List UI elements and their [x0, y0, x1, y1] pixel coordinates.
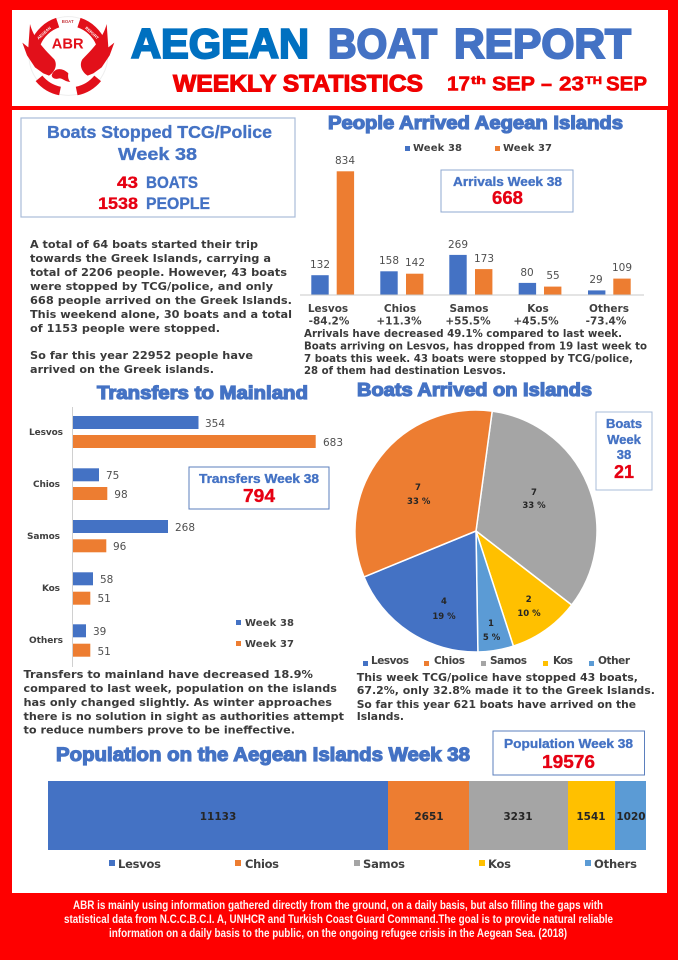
bar chart: transfers: 39 — [93, 626, 106, 638]
callout: boats week 38 — [596, 412, 652, 490]
text block: boats commentary: Islands. — [357, 710, 404, 723]
bar chart: arrivals: Samos — [449, 303, 489, 315]
heading: population: Population on the Aegean Islands Week 38 — [56, 745, 470, 766]
bar chart: arrivals: -73.4% — [586, 316, 627, 328]
pie chart: boats arrived: 1 — [488, 619, 494, 629]
legend: population — [109, 857, 637, 871]
bar chart: arrivals: +55.5% — [445, 316, 491, 328]
date range: 23 — [559, 74, 584, 96]
callout: arrivals week 38 — [441, 170, 573, 212]
legend: transfers chart — [236, 618, 294, 650]
text block: arrivals commentary: 7 boats this week. 43 boats were stopped by TCG/police, — [304, 352, 633, 365]
heading: transfers: Transfers to Mainland — [97, 383, 308, 403]
stacked bar: population: 2651 — [414, 811, 444, 823]
text block: arrivals commentary: Boats arriving on Lesvos, has dropped from 19 last week to — [304, 340, 647, 352]
bar chart: arrivals: 173 — [474, 253, 494, 265]
text block: arrivals commentary — [304, 327, 647, 377]
bar chart: arrivals: 132 — [310, 259, 330, 271]
bar chart: transfers: 354 — [205, 418, 225, 430]
legend: pie chart — [363, 655, 631, 667]
bar chart: transfers: Others — [29, 636, 63, 646]
text block: transfers commentary — [24, 668, 344, 736]
bar chart: arrivals: 142 — [405, 257, 425, 269]
bar chart: transfers: 51 — [98, 646, 111, 658]
footer text: ABR is mainly using information gathered directly from the ground, on a daily basis, but also filling the gaps with — [73, 900, 603, 912]
text block: transfers commentary: has only changed slightly. As winter approaches — [24, 696, 332, 709]
date range: TH — [585, 75, 602, 87]
bar chart: transfers: 96 — [113, 541, 127, 553]
legend: pie chart: Chios — [434, 655, 465, 667]
text block: weekly summary: total of 2206 people. However, 43 boats — [30, 266, 287, 279]
legend: transfers chart: Week 38 — [245, 618, 294, 629]
header panel — [12, 10, 668, 106]
heading: boats arrived: Boats Arrived on Islands — [357, 380, 592, 400]
bar chart: transfers: Lesvos — [29, 428, 63, 438]
text block: weekly summary: This weekend alone, 30 boats and a total — [30, 308, 292, 321]
pie chart: boats arrived — [355, 410, 597, 652]
bar chart: transfers: Chios — [33, 480, 60, 490]
panel: boats stopped — [21, 118, 295, 217]
bar chart: arrivals: Lesvos — [308, 303, 348, 315]
callout: boats week 38: Week — [607, 432, 642, 447]
legend: pie chart: Lesvos — [371, 655, 409, 667]
legend: population: Kos — [488, 857, 511, 871]
legend: arrivals chart: Week 38 — [413, 143, 462, 154]
callout: population week 38 — [493, 731, 644, 775]
text block: transfers commentary: there is no solution in sight as authorities attempt — [24, 710, 344, 723]
text block: transfers commentary: to reduce numbers prove to be ineffective. — [24, 724, 295, 736]
stacked bar: population: 1541 — [576, 811, 606, 823]
legend: transfers chart: Week 37 — [245, 639, 294, 650]
callout: boats week 38: 38 — [617, 447, 631, 462]
panel: boats stopped: PEOPLE — [146, 194, 210, 213]
pie chart: boats arrived: 5 % — [483, 633, 501, 643]
callout: boats week 38: 21 — [614, 462, 634, 482]
callout: arrivals week 38: Arrivals Week 38 — [453, 174, 562, 189]
text block: weekly summary: A total of 64 boats started their trip — [30, 238, 258, 251]
text block: weekly summary: were stopped by TCG/police, and only — [30, 280, 273, 293]
bar chart: arrivals: +11.3% — [376, 316, 422, 328]
bar chart: arrivals: 80 — [520, 267, 534, 279]
text block: arrivals commentary: Arrivals have decreased 49.1% compared to last week. — [304, 327, 622, 340]
panel: boats stopped: BOATS — [146, 173, 198, 192]
stacked bar: population: 3231 — [503, 811, 533, 823]
stacked bar: population: 11133 — [200, 811, 236, 823]
bar chart: arrivals: 55 — [546, 270, 560, 282]
bar chart: transfers: Samos — [27, 532, 60, 542]
icon: ABR logo — [22, 17, 114, 95]
text block: weekly summary: arrived on the Greek islands. — [30, 363, 214, 376]
pie chart: boats arrived: 33 % — [407, 497, 431, 507]
icon: ABR logo: ABR — [52, 37, 84, 53]
bar chart: transfers: 683 — [323, 437, 343, 449]
main white panel — [12, 110, 667, 893]
bar chart: arrivals: +45.5% — [513, 316, 559, 328]
footer text: information on a daily basis to the public, on the ongoing refugee crisis in the Aegean Sea. (2018) — [109, 928, 567, 940]
bar chart: arrivals — [300, 155, 644, 328]
text block: weekly summary: So far this year 22952 people have — [30, 349, 253, 362]
panel: boats stopped: 1538 — [98, 194, 138, 213]
bar chart: arrivals: Kos — [527, 303, 549, 315]
bar chart: arrivals: -84.2% — [309, 316, 350, 328]
date range — [447, 74, 647, 96]
title: REPORT — [454, 20, 631, 67]
legend: pie chart: Samos — [490, 655, 527, 667]
callout: transfers week 38: 794 — [243, 486, 275, 506]
icon: ABR logo: REPORT — [84, 25, 100, 41]
legend: population: Chios — [245, 857, 279, 871]
text block: transfers commentary: Transfers to mainland have decreased 18.9% — [24, 668, 313, 681]
panel: boats stopped: Boats Stopped TCG/Police — [47, 122, 272, 142]
date range: SEP — [606, 74, 647, 96]
text block: boats commentary: This week TCG/police have stopped 43 boats, — [357, 671, 638, 684]
icon: ABR logo: AEGEAN — [36, 25, 52, 40]
bar chart: transfers: 75 — [106, 470, 119, 482]
callout: arrivals week 38: 668 — [492, 188, 523, 208]
legend: arrivals chart — [405, 143, 552, 154]
legend: arrivals chart: Week 37 — [503, 143, 552, 154]
title: BOAT — [328, 20, 437, 67]
title — [131, 20, 631, 67]
text block: arrivals commentary: 28 of them had destination Lesvos. — [304, 364, 506, 377]
bar chart: arrivals: 29 — [589, 274, 603, 286]
panel: boats stopped: Week 38 — [118, 144, 197, 164]
text block: boats commentary: 67.2%, only 32.8% made it to the Greek Islands. — [357, 684, 655, 697]
text block: transfers commentary: compared to last week, population on the islands — [24, 682, 337, 695]
pie chart: boats arrived: 4 — [441, 597, 447, 607]
pie chart: boats arrived: 33 % — [522, 501, 546, 511]
stacked bar: population — [48, 781, 646, 850]
callout: population week 38: Population Week 38 — [504, 736, 633, 751]
text block: boats commentary — [357, 671, 655, 723]
callout: transfers week 38 — [189, 467, 329, 509]
bar chart: transfers — [27, 407, 343, 667]
legend: population: Samos — [363, 857, 405, 871]
bar chart: arrivals: Chios — [384, 303, 416, 315]
date range: 17 — [447, 74, 470, 96]
bar chart: arrivals: 269 — [448, 239, 468, 251]
bar chart: transfers: 268 — [175, 522, 195, 534]
text block: boats commentary: So far this year 621 boats have arrived on the — [357, 698, 636, 711]
bar chart: arrivals: 109 — [612, 262, 632, 274]
bar chart: transfers: Kos — [42, 584, 60, 594]
date range: SEP — [492, 74, 535, 96]
title: AEGEAN — [131, 20, 309, 67]
bar chart: transfers: 51 — [98, 593, 111, 605]
pie chart: boats arrived: 19 % — [432, 612, 456, 622]
bar chart: arrivals: 158 — [379, 255, 399, 267]
panel: boats stopped: 43 — [117, 173, 138, 192]
bar chart: arrivals: 834 — [335, 155, 355, 167]
pie chart: boats arrived: 10 % — [517, 609, 541, 619]
subtitle: WEEKLY STATISTICS — [173, 70, 423, 98]
pie chart: boats arrived: 7 — [415, 483, 421, 493]
icon: ABR logo: BOAT — [62, 19, 74, 24]
callout: population week 38: 19576 — [542, 752, 595, 772]
legend: population: Others — [594, 857, 637, 871]
legend: population: Lesvos — [118, 857, 161, 871]
bar chart: arrivals: Others — [589, 303, 629, 315]
text block: weekly summary: 668 people arrived on the Greek Islands. — [30, 294, 292, 307]
pie chart: boats arrived: 2 — [526, 595, 532, 605]
footer text — [64, 900, 613, 940]
text block: weekly summary: of 1153 people were stopped. — [30, 322, 220, 335]
callout: transfers week 38: Transfers Week 38 — [199, 471, 319, 486]
stacked bar: population: 1020 — [616, 811, 646, 823]
heading: people arrived: People Arrived Aegean Islands — [328, 113, 623, 133]
bar chart: transfers: 58 — [100, 574, 113, 586]
callout: boats week 38: Boats — [606, 416, 642, 431]
text block: weekly summary: towards the Greek Islands, carrying a — [30, 252, 271, 265]
legend: pie chart: Other — [598, 655, 631, 667]
legend: pie chart: Kos — [553, 655, 573, 667]
date range: – — [541, 74, 552, 96]
pie chart: boats arrived: 7 — [531, 488, 537, 498]
bar chart: transfers: 98 — [114, 489, 128, 501]
text block: weekly summary — [30, 238, 292, 376]
date range: th — [471, 75, 486, 87]
